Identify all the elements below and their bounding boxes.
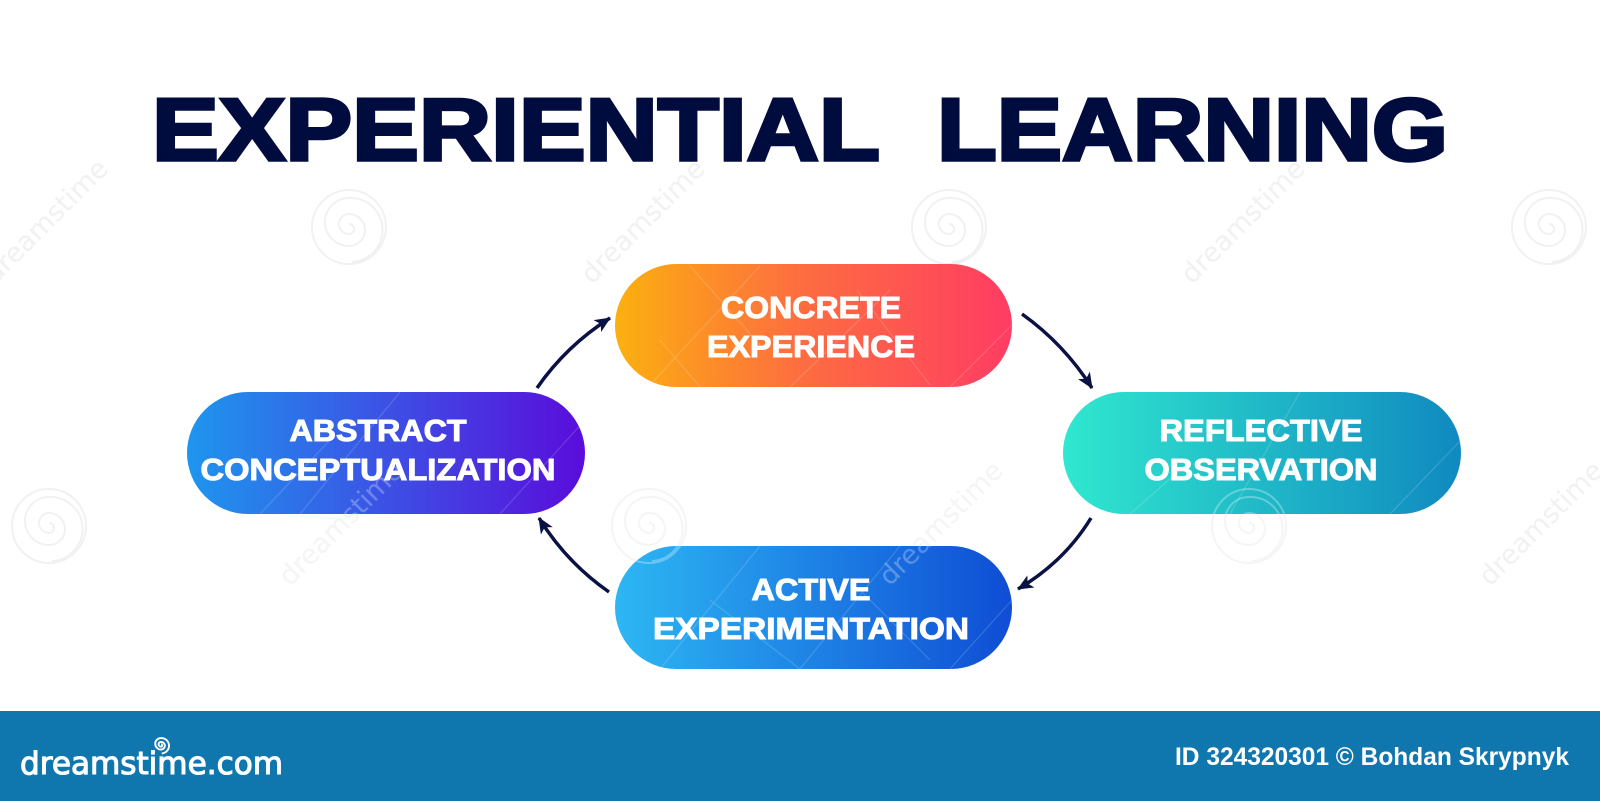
pill: abstract conceptualization: CONCEPTUALIZATION — [200, 452, 556, 487]
pill: concrete experience: CONCRETE — [721, 290, 901, 325]
title: EXPERIENTIAL — [152, 80, 880, 179]
pill: reflective observation: REFLECTIVE — [1160, 413, 1362, 448]
arrow: reflective to active — [1018, 518, 1091, 589]
pill: abstract conceptualization: ABSTRACT — [290, 413, 467, 448]
footer credit: ID 324320301 © Bohdan Skrypnyk — [1175, 743, 1569, 771]
footer band — [0, 711, 1600, 801]
pill: abstract conceptualization — [187, 392, 585, 514]
watermark overlay on pills — [260, 266, 1461, 669]
pill: concrete experience: EXPERIENCE — [707, 329, 915, 364]
arrow: abstract to concrete — [537, 318, 610, 388]
arrow: active to abstract — [539, 518, 609, 592]
watermark background: dreamstime — [575, 153, 712, 290]
pill: reflective observation — [1063, 392, 1461, 514]
watermark background — [0, 153, 1600, 592]
watermark background: dreamstime — [273, 455, 410, 592]
watermark overlay on pills: dreamstime — [873, 455, 1010, 592]
title: LEARNING — [937, 80, 1448, 179]
watermark background: dreamstime — [1175, 153, 1312, 290]
pill: reflective observation: OBSERVATION — [1144, 452, 1378, 487]
footer logo: dreamstime.com — [20, 746, 283, 782]
pill: active experimentation — [615, 546, 1012, 669]
title — [152, 80, 1448, 179]
pill: concrete experience — [615, 264, 1012, 387]
pill: active experimentation: EXPERIMENTATION — [653, 611, 969, 646]
watermark overlay on pills: dreamstime — [273, 455, 410, 592]
watermark background: dreamstime — [873, 455, 1010, 592]
arrow: concrete to reflective — [1022, 314, 1092, 388]
pill: active experimentation: ACTIVE — [752, 572, 870, 607]
